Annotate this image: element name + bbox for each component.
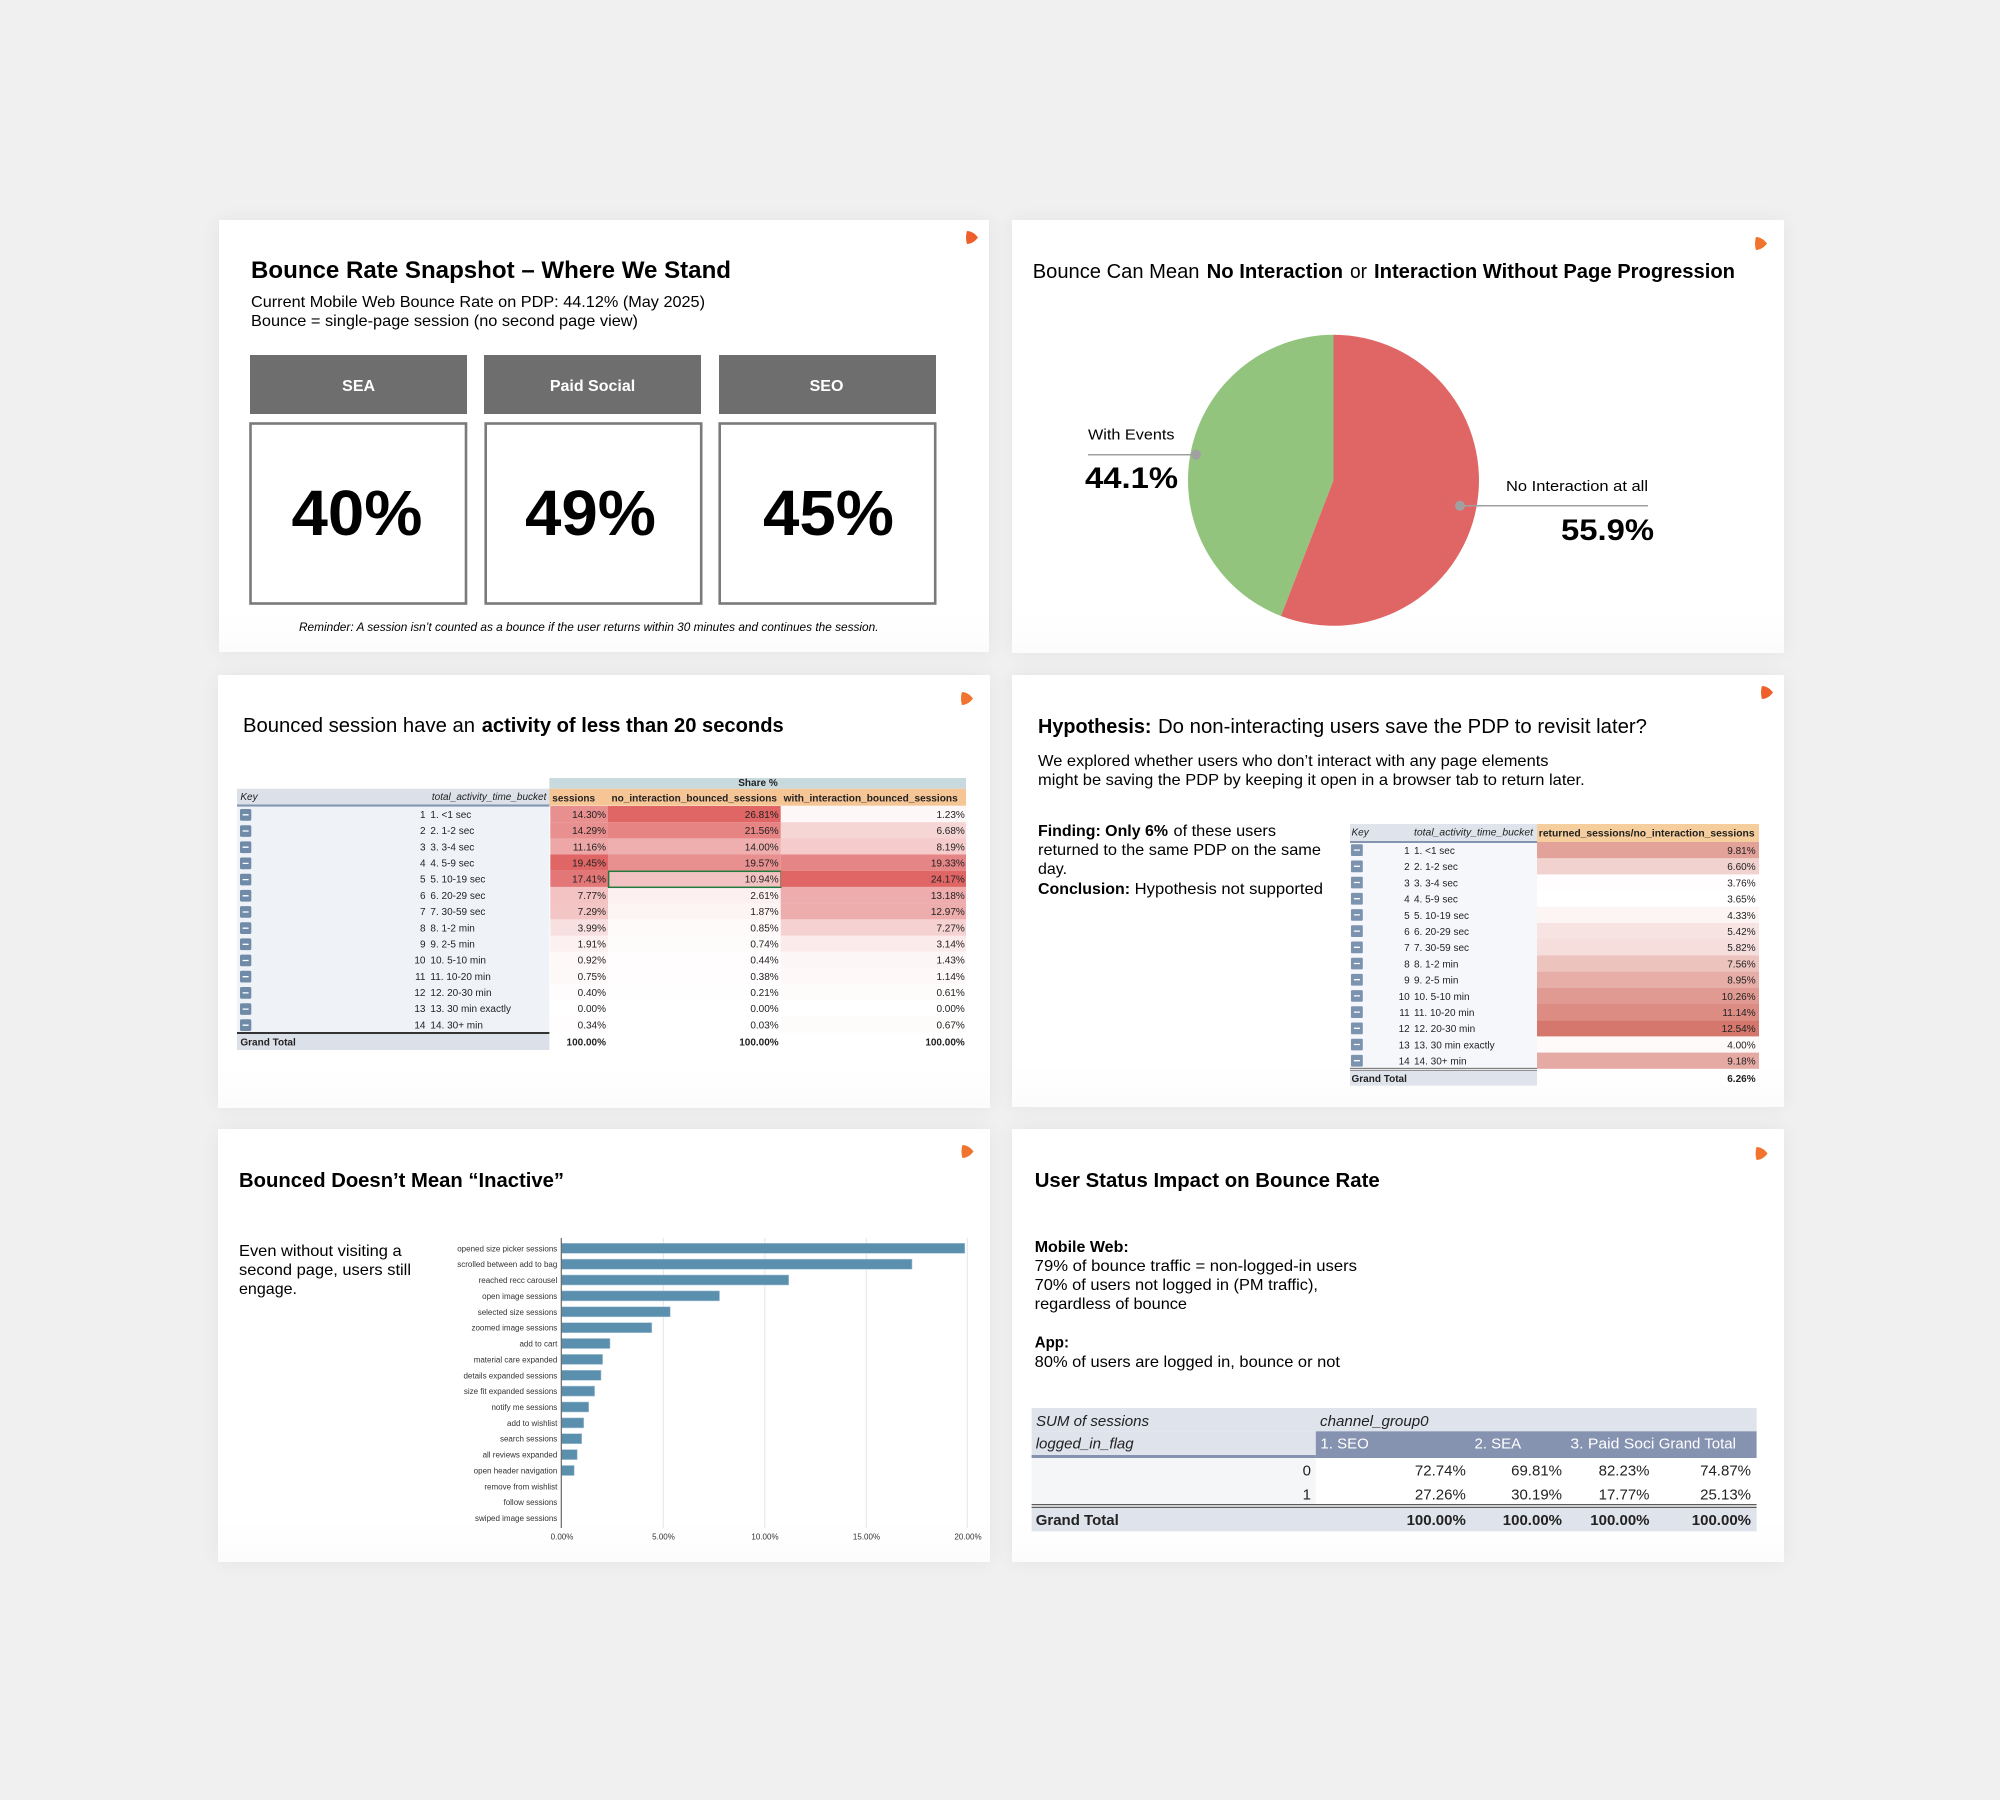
grand total row: 100.00% [1407, 1512, 1466, 1529]
table header [1032, 1408, 1757, 1458]
text block: mobile web: regardless of bounce [1035, 1296, 1187, 1313]
heading: user status title: User Status Impact on Bounce Rate [1035, 1169, 1380, 1192]
heading: pie title: or [1350, 260, 1367, 283]
heatmap column: no interaction: 21.56% [745, 826, 779, 837]
heatmap column: no interaction [608, 806, 781, 1031]
key column: 2 [1404, 862, 1410, 873]
key column: 3 [420, 842, 426, 853]
key column: 2. 1-2 sec [1414, 862, 1458, 873]
key column: 7 [420, 907, 426, 918]
heatmap column: no interaction: 1.87% [750, 907, 779, 918]
heading: hypothesis title: Hypothesis: [1038, 715, 1152, 738]
heatmap column: with interaction: 24.17% [931, 875, 965, 886]
key column: 3. 3-4 sec [430, 842, 474, 853]
heading: activity title: activity of less than 20 seconds [482, 714, 784, 737]
callout: with events: With Events [1088, 426, 1174, 443]
table rows: 17.77% [1599, 1486, 1650, 1503]
text block: finding and conclusion: Hypothesis not supported [1135, 881, 1323, 898]
heatmap column: with interaction: 3.14% [936, 939, 965, 950]
text block: finding and conclusion: Conclusion: [1038, 881, 1130, 898]
heatmap column: returned share: 3.65% [1727, 895, 1756, 906]
key column: 3. 3-4 sec [1414, 878, 1458, 889]
card: Paid Social [484, 355, 701, 604]
card: SEO: SEO [810, 378, 843, 395]
heatmap column: returned share: 12.54% [1722, 1024, 1756, 1035]
key column: 11 [415, 972, 426, 983]
key column: 12 [414, 988, 426, 999]
key column: 12 [1399, 1024, 1410, 1035]
text block: snapshot description: Bounce = single-page session (no second page view) [251, 313, 638, 330]
axis labels [551, 1532, 982, 1541]
grand total row [237, 1032, 965, 1050]
table rows: 1 [1303, 1486, 1311, 1503]
key column: 13. 30 min exactly [1414, 1040, 1495, 1051]
callout: with events: 44.1% [1085, 462, 1178, 495]
key column: 4. 5-9 sec [430, 858, 474, 870]
key column: 5 [1404, 911, 1410, 922]
key column: 11. 10-20 min [430, 972, 491, 983]
category labels: scrolled between add to bag [457, 1260, 557, 1269]
table header: no_interaction_bounced_sessions [612, 794, 777, 805]
category labels: swiped image sessions [475, 1514, 557, 1523]
table header: with_interaction_bounced_sessions [783, 794, 958, 805]
table rows [1032, 1458, 1751, 1504]
heatmap column: with interaction: 7.27% [936, 923, 965, 934]
text block: hypothesis description: might be saving the PDP by keeping it open in a browser tab to return later. [1038, 772, 1585, 789]
key column: 1 [420, 810, 426, 821]
key column: 7. 30-59 sec [430, 907, 485, 918]
card: SEA: 40% [292, 477, 422, 549]
text block: mobile web: 79% of bounce traffic = non-logged-in users [1035, 1258, 1357, 1275]
table header: Key [1352, 828, 1370, 839]
card: SEO: 45% [763, 477, 894, 549]
heatmap column: with interaction: 8.19% [936, 842, 965, 853]
panel: user status impact [1012, 1129, 1784, 1562]
table rows: 27.26% [1415, 1486, 1466, 1503]
table header [237, 778, 966, 807]
key column: 10. 5-10 min [430, 956, 486, 967]
heatmap column: sessions: 7.77% [578, 891, 606, 902]
key column: 4 [1404, 895, 1410, 906]
key column: 14. 30+ min [430, 1020, 483, 1031]
heatmap column: returned share: 5.82% [1727, 943, 1756, 954]
text block: reminder note: Reminder: A session isn’t counted as a bounce if the user returns within 30 minutes and continues the session. [299, 620, 878, 634]
axis labels: 0.00% [551, 1532, 573, 1541]
heatmap column: no interaction: 0.85% [750, 923, 779, 934]
key column: 5. 10-19 sec [1414, 911, 1469, 922]
heatmap column: with interaction: 0.67% [936, 1020, 965, 1031]
category labels: notify me sessions [491, 1403, 557, 1412]
key column: 1 [1404, 846, 1410, 857]
grand total row: 100.00% [1692, 1512, 1751, 1529]
table header: 2. SEA [1474, 1435, 1521, 1452]
icon: logo mark [962, 1145, 974, 1158]
heading: pie title: Bounce Can Mean [1033, 260, 1200, 283]
category labels: add to wishlist [507, 1419, 558, 1428]
grand total row: 100.00% [1503, 1512, 1562, 1529]
heatmap column: sessions: 0.75% [578, 972, 606, 983]
heatmap column: sessions: 0.92% [578, 956, 606, 967]
table: logged in flag [1032, 1408, 1757, 1531]
text block: engagement note: engage. [239, 1281, 297, 1298]
axis labels: 5.00% [652, 1532, 675, 1541]
heading: pie title: No Interaction [1207, 260, 1343, 283]
table rows: 72.74% [1415, 1462, 1466, 1479]
heatmap column: sessions: 14.29% [572, 826, 606, 837]
panel: bounce split pie [1012, 220, 1784, 653]
heatmap column: sessions [550, 806, 608, 1032]
category labels: follow sessions [503, 1498, 557, 1507]
table header: sessions [552, 794, 596, 805]
heading: pie title [1033, 260, 1735, 283]
heatmap column: sessions: 17.41% [572, 875, 606, 886]
key column: 11 [1399, 1008, 1410, 1019]
callout: no interaction: No Interaction at all [1506, 478, 1648, 495]
bars [562, 1243, 965, 1476]
key column: 12. 20-30 min [1414, 1024, 1475, 1035]
panel: bounce rate snapshot [218, 220, 990, 652]
table: activity buckets [237, 778, 966, 1050]
table header: 3. Paid Soci [1570, 1435, 1654, 1452]
text block: hypothesis description [1038, 753, 1585, 789]
heatmap column: sessions: 1.91% [578, 939, 606, 950]
heatmap column: sessions: 11.16% [573, 842, 606, 853]
key column: 8 [420, 923, 426, 934]
heatmap column: with interaction: 13.18% [931, 891, 965, 902]
heatmap column: with interaction: 12.97% [931, 907, 965, 918]
heatmap column: sessions: 0.00% [578, 1004, 606, 1015]
grand total row: Grand Total [1352, 1074, 1407, 1085]
key column: 8 [1404, 959, 1410, 970]
text block: finding and conclusion: day. [1038, 861, 1067, 878]
key column: 10 [1399, 992, 1410, 1003]
icon: logo mark [1755, 237, 1767, 250]
text block: finding and conclusion: returned to the same PDP on the same [1038, 842, 1321, 859]
heatmap column: returned share: 8.95% [1727, 976, 1756, 987]
category labels: material care expanded [474, 1355, 557, 1364]
text block: app: 80% of users are logged in, bounce or not [1035, 1354, 1341, 1371]
key column: 5 [420, 875, 426, 886]
table header: total_activity_time_bucket [1414, 828, 1534, 839]
axis labels: 15.00% [853, 1532, 880, 1541]
key column: 14 [1399, 1057, 1410, 1068]
key column: 8. 1-2 min [1414, 959, 1458, 970]
key column: 6 [420, 891, 426, 902]
text block: mobile web [1035, 1239, 1357, 1313]
category labels: add to cart [519, 1340, 558, 1348]
heatmap column: returned share: 5.42% [1727, 927, 1756, 938]
table rows: 69.81% [1511, 1462, 1562, 1479]
heatmap column: no interaction: 0.03% [750, 1020, 779, 1031]
callout: no interaction [1455, 478, 1654, 547]
table header: Share % [738, 778, 778, 789]
callout: with events [1085, 426, 1201, 495]
text block: finding and conclusion: Finding: Only 6% [1038, 823, 1168, 840]
panel: hypothesis [1012, 675, 1784, 1107]
heatmap column: with interaction: 1.14% [936, 972, 965, 983]
heatmap column: no interaction: 0.21% [750, 988, 779, 999]
heatmap column: with interaction: 0.61% [936, 988, 965, 999]
text block: snapshot description [251, 294, 705, 330]
heatmap column: with interaction: 19.33% [931, 858, 965, 870]
axis labels: 10.00% [751, 1532, 779, 1541]
table rows: 74.87% [1700, 1462, 1751, 1479]
key column: 4 [420, 858, 426, 870]
key column [237, 807, 549, 1032]
heatmap column: with interaction: 0.00% [936, 1004, 965, 1015]
table rows: 82.23% [1599, 1462, 1650, 1479]
grand total row [1032, 1505, 1757, 1531]
text block: finding and conclusion: of these users [1174, 823, 1276, 840]
heatmap column: returned share: 6.60% [1727, 862, 1756, 873]
heading: activity title [243, 714, 784, 737]
table header: channel_group0 [1320, 1413, 1429, 1430]
heatmap column: returned share [1537, 842, 1759, 1069]
grand total row: 100.00% [739, 1037, 779, 1048]
category labels: selected size sessions [478, 1308, 557, 1317]
table header: SUM of sessions [1036, 1413, 1149, 1430]
heatmap column: returned share: 7.56% [1727, 959, 1756, 970]
category labels: all reviews expanded [483, 1451, 557, 1460]
heatmap column: sessions: 3.99% [578, 923, 606, 934]
card: SEO [719, 355, 936, 604]
heatmap column: returned share: 4.00% [1727, 1040, 1756, 1051]
key column: 13 [1399, 1040, 1410, 1051]
key column: 9 [1404, 976, 1410, 987]
text block: app: App: [1035, 1335, 1069, 1352]
icon: logo mark [966, 231, 978, 244]
heatmap column: returned share: 10.26% [1722, 992, 1756, 1003]
heatmap column: no interaction: 0.00% [750, 1004, 779, 1015]
key column: 6. 20-29 sec [1414, 927, 1469, 938]
heatmap column: no interaction: 0.44% [750, 956, 779, 967]
icon: logo mark [961, 692, 973, 705]
icon: logo mark [1756, 1147, 1768, 1160]
key column: 8. 1-2 min [430, 923, 475, 934]
panel: bounced does not mean inactive [218, 1129, 990, 1562]
key column: 14. 30+ min [1414, 1057, 1467, 1068]
grand total row: 100.00% [1590, 1512, 1650, 1529]
heatmap column: returned share: 11.14% [1722, 1008, 1756, 1019]
key column: 2 [420, 826, 426, 837]
heading: activity title: Bounced session have an [243, 714, 475, 737]
key column: 9. 2-5 min [430, 939, 475, 950]
chart: engagement bars [457, 1238, 982, 1541]
table header: total_activity_time_bucket [432, 792, 548, 803]
category labels: open image sessions [482, 1292, 557, 1301]
grand total row: 100.00% [925, 1037, 965, 1048]
key column: 13. 30 min exactly [430, 1004, 511, 1015]
card: Paid Social: Paid Social [550, 378, 635, 395]
category labels: opened size picker sessions [457, 1244, 557, 1253]
table header: Key [240, 792, 259, 803]
heatmap column: no interaction: 26.81% [745, 810, 779, 821]
grand total row: 6.26% [1727, 1074, 1756, 1085]
category labels: remove from wishlist [484, 1482, 558, 1491]
heatmap column: with interaction [781, 806, 966, 1032]
grand total row [1350, 1068, 1756, 1086]
card: SEA: SEA [342, 378, 375, 395]
category labels: size fit expanded sessions [464, 1387, 557, 1396]
text block: engagement note [239, 1243, 411, 1298]
heatmap column: with interaction: 1.43% [936, 956, 965, 967]
heatmap column: no interaction: 0.74% [750, 939, 779, 950]
key column: 7. 30-59 sec [1414, 943, 1469, 954]
heading: hypothesis title: Do non-interacting users save the PDP to revisit later? [1158, 715, 1647, 738]
panel: activity time table [218, 675, 990, 1108]
heatmap column: returned share: 3.76% [1727, 878, 1756, 889]
category labels: reached recc carousel [479, 1276, 558, 1285]
card: Paid Social: 49% [525, 477, 656, 549]
heatmap column: no interaction: 10.94% [745, 875, 779, 886]
category labels: open header navigation [474, 1466, 557, 1476]
text block: snapshot description: Current Mobile Web Bounce Rate on PDP: 44.12% (May 2025) [251, 294, 705, 311]
grand total row: 100.00% [567, 1037, 606, 1048]
key column: 10. 5-10 min [1414, 992, 1470, 1003]
table header: 1. SEO [1320, 1435, 1369, 1452]
heatmap column: sessions: 19.45% [572, 858, 606, 870]
table header: Grand Total [1659, 1435, 1736, 1452]
callout: no interaction: 55.9% [1561, 514, 1654, 547]
chart: pie [1188, 335, 1479, 626]
heatmap column: no interaction: 19.57% [745, 858, 779, 870]
grand total row: Grand Total [1036, 1512, 1119, 1529]
category labels: zoomed image sessions [471, 1324, 557, 1333]
heading: snapshot title: Bounce Rate Snapshot – Where We Stand [251, 257, 731, 284]
heatmap column: sessions: 0.40% [578, 988, 606, 999]
table header: returned_sessions/no_interaction_sessions [1539, 829, 1755, 840]
axis labels: 20.00% [954, 1532, 982, 1541]
table rows: 25.13% [1700, 1486, 1751, 1503]
text block: app [1035, 1335, 1341, 1371]
heatmap column: returned share: 9.81% [1727, 846, 1756, 857]
text block: engagement note: second page, users still [239, 1262, 411, 1279]
key column: 7 [1404, 943, 1410, 954]
category labels: search sessions [500, 1435, 557, 1444]
heading: inactive title: Bounced Doesn’t Mean “Inactive” [239, 1169, 564, 1192]
grand total row: Grand Total [240, 1037, 296, 1048]
key column: 12. 20-30 min [430, 988, 492, 999]
text block: engagement note: Even without visiting a [239, 1243, 402, 1260]
key column: 3 [1404, 878, 1410, 889]
heatmap column: no interaction: 0.38% [750, 972, 779, 983]
key column [1350, 843, 1537, 1068]
key column: 6 [1404, 927, 1410, 938]
table rows: 0 [1303, 1462, 1311, 1479]
heatmap column: sessions: 14.30% [572, 810, 606, 821]
table: returned sessions [1350, 824, 1759, 1086]
text block: mobile web: 70% of users not logged in (PM traffic), [1035, 1277, 1318, 1294]
text block: hypothesis description: We explored whether users who don’t interact with any page elements [1038, 753, 1548, 770]
key column: 2. 1-2 sec [430, 826, 474, 837]
key column: 6. 20-29 sec [430, 891, 485, 902]
key column: 1. <1 sec [1414, 846, 1455, 857]
key column: 10 [414, 956, 426, 967]
heatmap column: returned share: 9.18% [1727, 1057, 1756, 1068]
card: SEA [250, 355, 467, 604]
key column: 14 [414, 1020, 426, 1031]
table header [1350, 824, 1759, 843]
key column: 1. <1 sec [430, 810, 471, 821]
heatmap column: returned share: 4.33% [1727, 911, 1756, 922]
category labels: details expanded sessions [463, 1371, 557, 1380]
heatmap column: sessions: 7.29% [578, 907, 606, 918]
heatmap column: with interaction: 6.68% [936, 826, 965, 837]
heatmap column: sessions: 0.34% [578, 1020, 606, 1031]
table rows: 30.19% [1511, 1486, 1562, 1503]
text block: finding and conclusion [1038, 823, 1323, 898]
key column: 9 [420, 939, 426, 950]
key column: 11. 10-20 min [1414, 1008, 1474, 1019]
heatmap column: no interaction: 2.61% [750, 891, 779, 902]
table header: logged_in_flag [1036, 1435, 1134, 1452]
text block: mobile web: Mobile Web: [1035, 1239, 1129, 1256]
heading: pie title: Interaction Without Page Progression [1374, 260, 1735, 283]
heatmap column: no interaction: 14.00% [745, 842, 779, 853]
key column: 9. 2-5 min [1414, 976, 1458, 987]
key column: 5. 10-19 sec [430, 875, 485, 886]
category labels [457, 1244, 558, 1523]
key column: 13 [414, 1004, 426, 1015]
heatmap column: with interaction: 1.23% [936, 810, 965, 821]
key column: 4. 5-9 sec [1414, 895, 1458, 906]
icon: logo mark [1761, 686, 1773, 699]
